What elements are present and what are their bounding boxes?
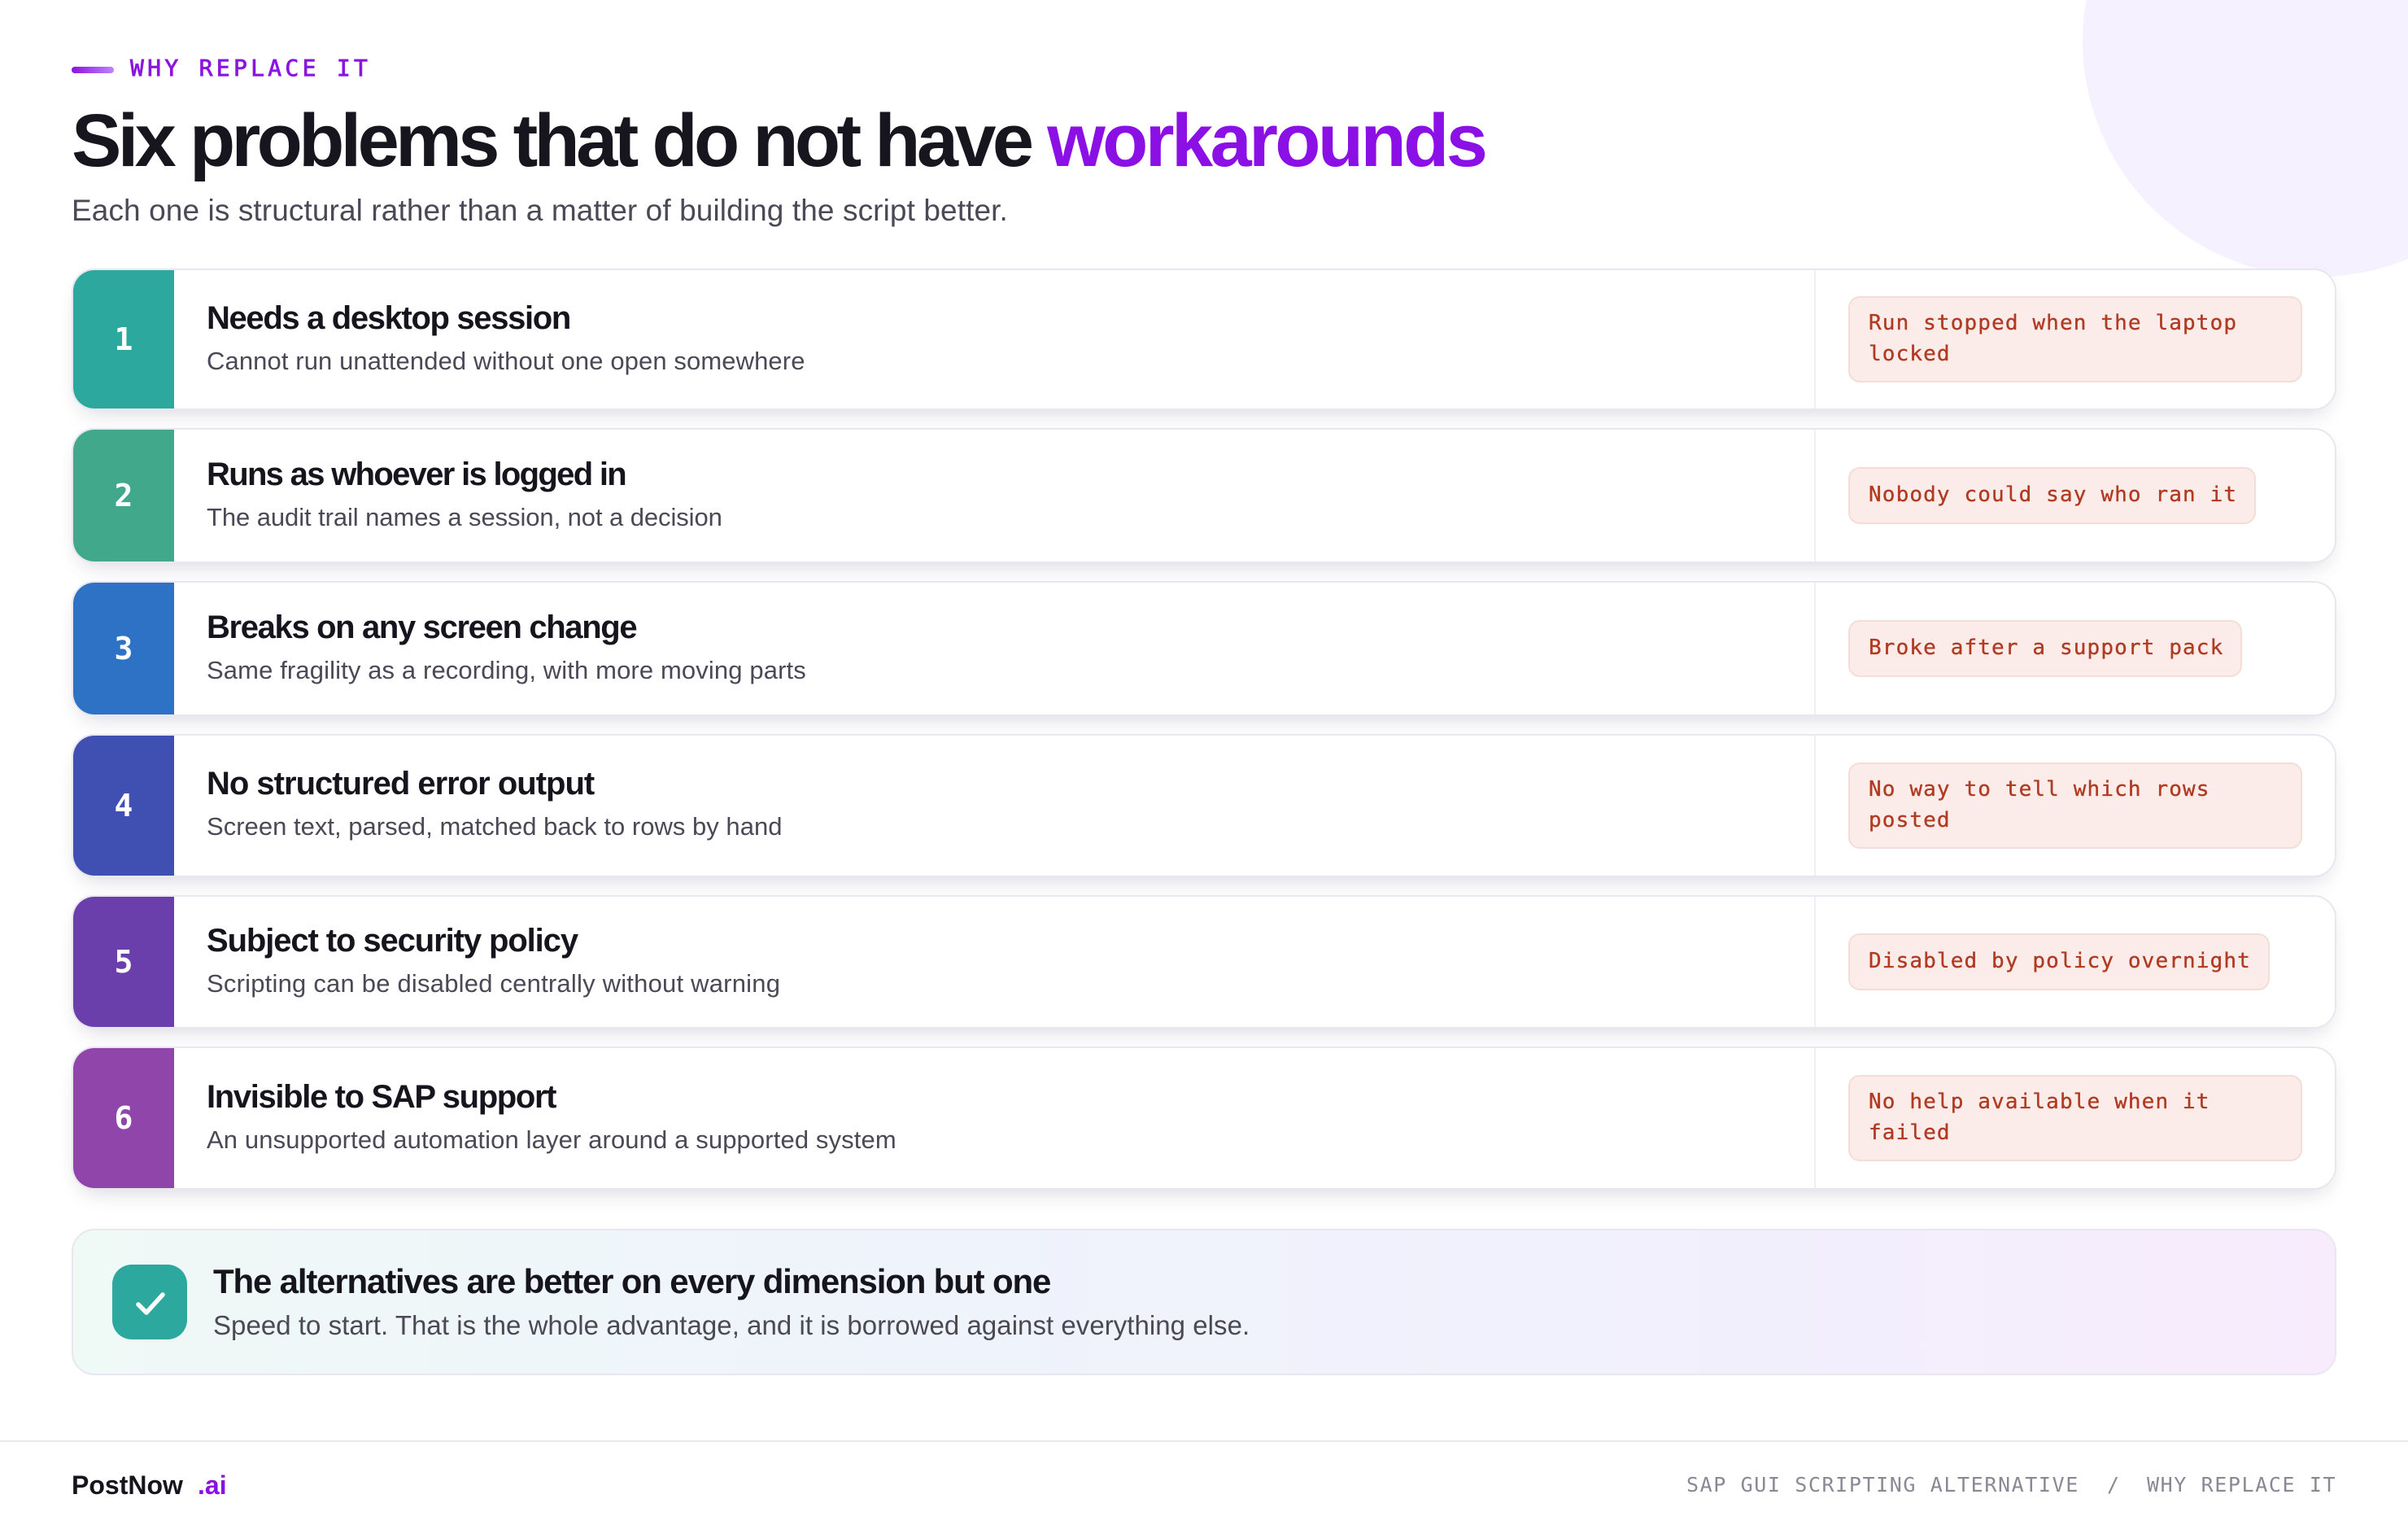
number 1: 1	[115, 321, 133, 357]
row 5 text	[207, 923, 780, 998]
number 3	[73, 583, 174, 714]
footer brand: PostNow	[72, 1470, 183, 1500]
row 6 text	[207, 1079, 896, 1154]
row 4 text: No structured error output	[207, 766, 594, 802]
row 2 evidence: Nobody could say who ran it	[1869, 483, 2237, 507]
subtitle: Each one is structural rather than a matter of building the script better.	[72, 194, 1008, 227]
row 6 evidence: No help available when it failed	[1869, 1090, 2210, 1145]
row 6 text: Invisible to SAP support	[207, 1079, 556, 1115]
summary heading: The alternatives are better on every dimension but one	[213, 1262, 1050, 1300]
footer breadcrumb: WHY REPLACE IT	[2147, 1473, 2336, 1496]
row 4 text	[207, 766, 782, 841]
number 5	[73, 897, 174, 1027]
row 5 text: Subject to security policy	[207, 923, 578, 959]
number 2: 2	[115, 478, 133, 513]
row 5 text: Scripting can be disabled centrally without warning	[207, 969, 780, 998]
row 1	[72, 269, 2336, 410]
footer breadcrumb: SAP GUI SCRIPTING ALTERNATIVE	[1686, 1473, 2079, 1496]
eyebrow text: WHY REPLACE IT	[130, 55, 371, 81]
row 6 text: An unsupported automation layer around a supported system	[207, 1125, 896, 1154]
row 6 evidence	[1814, 1048, 2335, 1188]
eyebrow	[72, 55, 371, 81]
row 3 text: Same fragility as a recording, with more moving parts	[207, 656, 806, 684]
row 2 evidence	[1814, 430, 2335, 561]
icon: check mark	[112, 1265, 187, 1339]
summary callout	[72, 1229, 2336, 1375]
row 1 evidence	[1814, 270, 2335, 409]
footer breadcrumb	[1686, 1473, 2336, 1496]
row 3 evidence	[1814, 583, 2335, 714]
row 1 evidence: Run stopped when the laptop locked	[1869, 311, 2237, 366]
footer rule	[0, 1440, 2408, 1442]
number 4: 4	[115, 788, 133, 824]
number 2	[73, 430, 174, 561]
row 3 evidence: Broke after a support pack	[1869, 636, 2223, 660]
row 1 text: Cannot run unattended without one open somewhere	[207, 347, 805, 375]
footer brand: .ai	[198, 1470, 227, 1500]
row 2	[72, 428, 2336, 563]
row 2 text: Runs as whoever is logged in	[207, 457, 626, 492]
summary text: Speed to start. That is the whole advantage, and it is borrowed against everything else.	[213, 1310, 1250, 1340]
row 4 text: Screen text, parsed, matched back to rows by hand	[207, 812, 782, 841]
row 5 evidence: Disabled by policy overnight	[1869, 949, 2251, 973]
row 6	[72, 1046, 2336, 1190]
row 4 evidence: No way to tell which rows posted	[1869, 777, 2210, 832]
number 6: 6	[115, 1100, 133, 1136]
number 1	[73, 270, 174, 409]
number 6	[73, 1048, 174, 1188]
row 1 text: Needs a desktop session	[207, 300, 570, 336]
title: Six problems that do not have workarounds	[72, 99, 1485, 182]
footer breadcrumb: /	[2107, 1473, 2121, 1496]
row 1 text	[207, 300, 805, 375]
number 3: 3	[115, 631, 133, 666]
number 4	[73, 736, 174, 876]
decorative circle	[2083, 0, 2408, 277]
row 3	[72, 581, 2336, 716]
row 4	[72, 734, 2336, 877]
row 2 text: The audit trail names a session, not a decision	[207, 503, 722, 531]
number 5: 5	[115, 944, 133, 980]
row 3 text	[207, 610, 806, 684]
row 5 evidence	[1814, 897, 2335, 1027]
row 3 text: Breaks on any screen change	[207, 610, 636, 645]
eyebrow bar	[72, 67, 114, 73]
row 4 evidence	[1814, 736, 2335, 876]
row 2 text	[207, 457, 722, 531]
row 5	[72, 895, 2336, 1029]
